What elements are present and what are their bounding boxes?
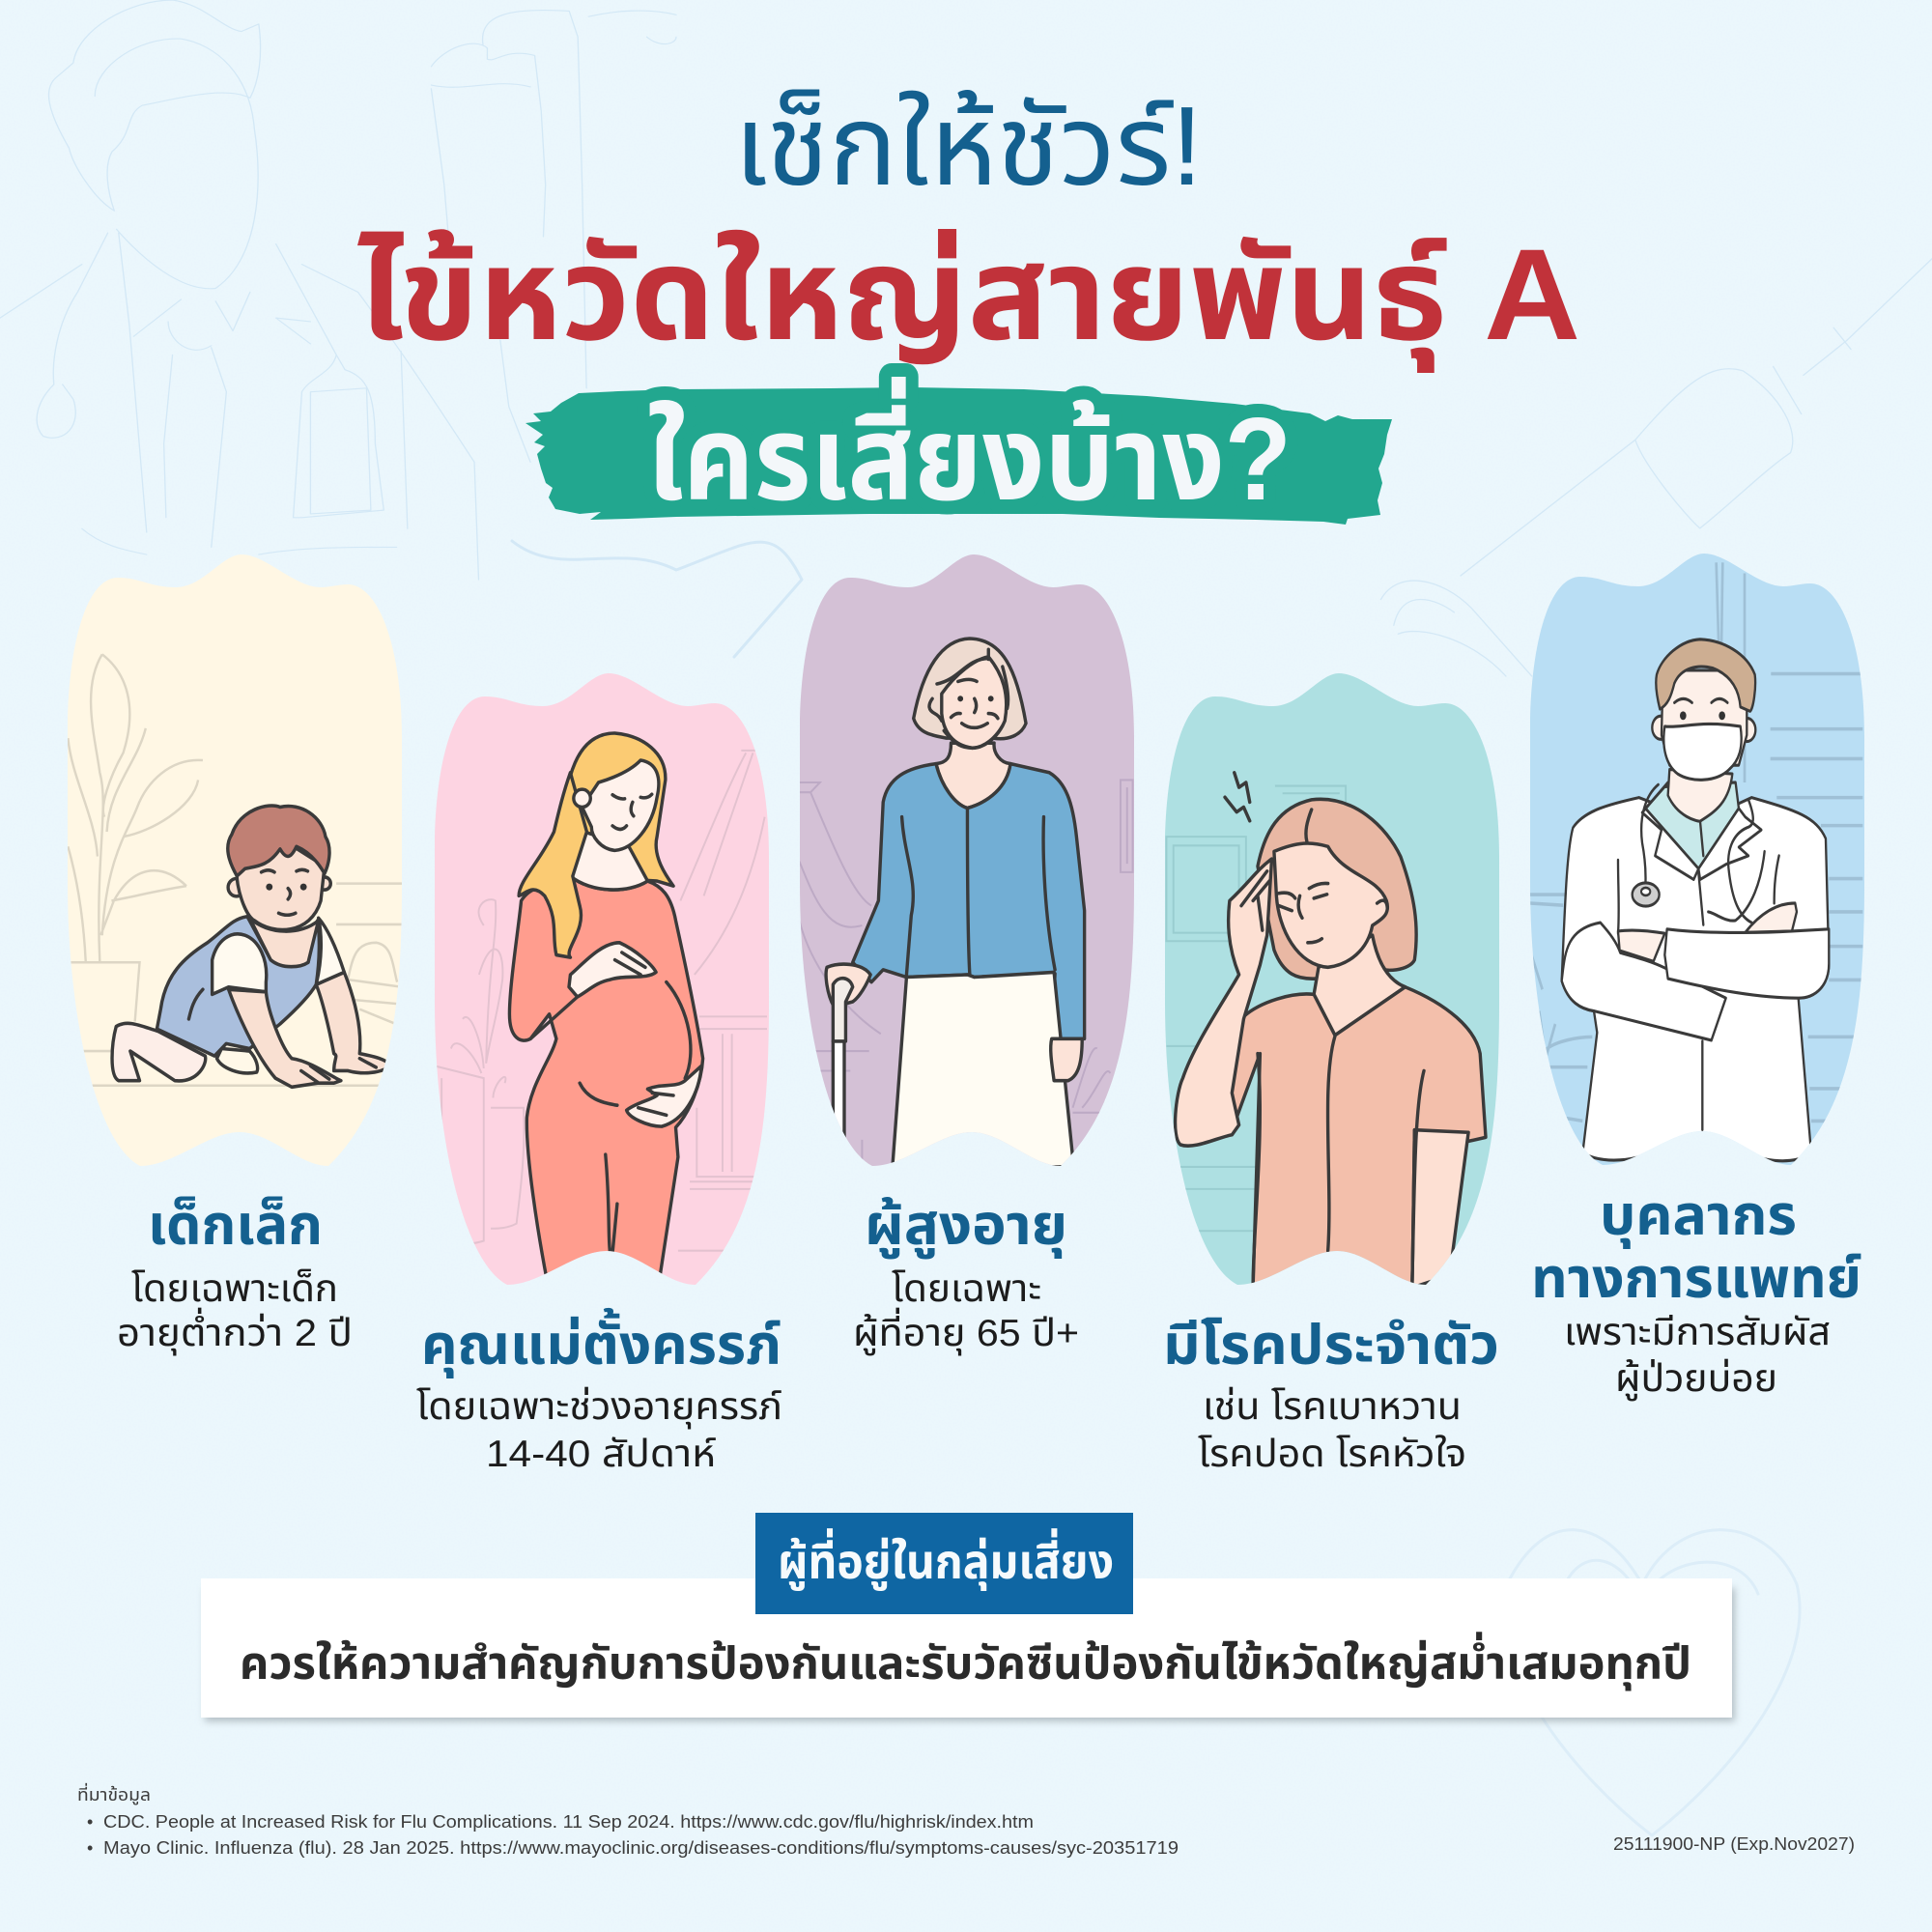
heading and description: บุคลากร: [1600, 1184, 1797, 1249]
brush stroke: [526, 387, 1392, 525]
shirt: [1230, 987, 1486, 1288]
heading and description: [853, 1194, 1079, 1355]
panel: elderly: [799, 554, 1134, 1355]
illustration: elderly woman with cane: [799, 639, 1133, 1167]
blue label text: ผู้ที่อยู่ในกลุ่มเสี่ยง: [778, 1528, 1114, 1591]
neck: [1668, 770, 1732, 821]
skirt: [893, 972, 1073, 1167]
raised arm: [1176, 859, 1272, 1146]
panel: medical personnel: [1530, 554, 1864, 1401]
dress: [509, 876, 703, 1280]
heading and description: คุณแม่ตั้งครรภ์: [421, 1307, 781, 1378]
face: [942, 657, 1007, 748]
heading and description: [117, 1194, 353, 1355]
heading and description: [1163, 1314, 1499, 1475]
hand and cane: [1051, 1038, 1082, 1081]
subtitle text: ใครเสี่ยงบ้าง?: [647, 377, 1292, 525]
heading and description: โรคปอด โรคหัวใจ: [1198, 1434, 1466, 1475]
heading and description: 14-40 สัปดาห์: [486, 1434, 716, 1475]
sources: Mayo Clinic. Influenza (flu). 28 Jan 2025. https://www.mayoclinic.org/diseases-conditions/flu/symptoms-causes/syc-20351719: [103, 1838, 1179, 1858]
neck: [1314, 935, 1406, 1036]
title: [357, 83, 1580, 373]
panel: chronic disease: [1163, 673, 1499, 1475]
recommendation text: ควรให้ความสำคัญกับการป้องกันและรับวัคซีนป้องกันไข้หวัดใหญ่สม่ำเสมอทุกปี: [240, 1632, 1691, 1690]
heading and description: โดยเฉพาะ: [892, 1268, 1041, 1310]
hair back: [563, 733, 673, 886]
blue label box: [755, 1513, 1133, 1614]
pain lightning marks: [1225, 773, 1250, 821]
face: [1274, 843, 1387, 967]
baby head: [228, 878, 245, 896]
head: [1652, 716, 1669, 739]
heading and description: ผู้สูงอายุ: [865, 1194, 1067, 1260]
heading and description: มีโรคประจำตัว: [1163, 1314, 1499, 1377]
panel shape: [435, 673, 769, 1285]
heading and description: [416, 1307, 782, 1475]
white box: [201, 1578, 1732, 1718]
face mask: [1663, 724, 1742, 780]
sources: ที่มาข้อมูล: [77, 1782, 151, 1806]
heading and description: โดยเฉพาะช่วงอายุครรภ์: [416, 1386, 782, 1429]
heading and description: เช่น โรคเบาหวาน: [1203, 1386, 1462, 1428]
white box shadow: [205, 1588, 1735, 1721]
hands: [569, 943, 656, 997]
panel shape: [800, 554, 1134, 1166]
hair: [914, 639, 1026, 739]
background line art: lungs and plants: [512, 541, 1800, 1835]
background line art: syringe: [1380, 259, 1932, 676]
background line art: doctor and IV bag: [0, 0, 676, 580]
face: [582, 760, 659, 850]
panel: pregnant women: [416, 673, 782, 1475]
shirt collar: [1645, 782, 1739, 868]
panel: young children: [68, 554, 402, 1355]
illustration: crawling baby: [68, 654, 402, 1087]
hair: [1258, 799, 1416, 979]
sources: •: [87, 1812, 93, 1832]
sources: CDC. People at Increased Risk for Flu Complications. 11 Sep 2024. https://www.cdc.gov/flu/highrisk/index.htm: [103, 1812, 1034, 1832]
document code: 25111900-NP (Exp.Nov2027): [1613, 1834, 1855, 1854]
heading and description: [1531, 1184, 1861, 1401]
heading and description: อายุต่ำกว่า 2 ปี: [117, 1307, 353, 1355]
neck: [570, 832, 647, 890]
baby body: [112, 1023, 206, 1081]
sources: •: [87, 1838, 93, 1858]
heading and description: ผู้ที่อายุ 65 ปี+: [853, 1307, 1079, 1355]
stethoscope: [1641, 784, 1765, 923]
hair front: [519, 773, 586, 957]
neck: [936, 743, 1010, 809]
heading and description: เพราะมีการสัมผัส: [1564, 1312, 1831, 1353]
panel shape: [68, 554, 402, 1166]
sources: [77, 1782, 1179, 1858]
cardigan: [853, 764, 1085, 1038]
callout: recommendation box: [201, 1513, 1735, 1721]
heading and description: ผู้ป่วยบ่อย: [1615, 1358, 1777, 1401]
crossed arms: [1618, 930, 1664, 961]
panel shape: [1530, 554, 1864, 1165]
heading and description: เด็กเล็ก: [148, 1194, 323, 1257]
title line 1: เช็กให้ชัวร์!: [734, 83, 1203, 209]
lab coat: [1562, 798, 1829, 1161]
heading and description: ทางการแพทย์: [1531, 1247, 1861, 1310]
illustration: pregnant woman: [435, 733, 767, 1280]
illustration: woman with headache: [1166, 773, 1486, 1288]
illustration: doctor with mask and stethoscope: [1530, 562, 1862, 1161]
lapels: [1642, 782, 1698, 879]
subtitle on teal brush stroke: [526, 377, 1392, 525]
heading and description: โดยเฉพาะเด็ก: [131, 1268, 338, 1310]
title line 2: ไข้หวัดใหญ่สายพันธุ์ A: [357, 223, 1580, 373]
panel shape: [1165, 673, 1499, 1285]
